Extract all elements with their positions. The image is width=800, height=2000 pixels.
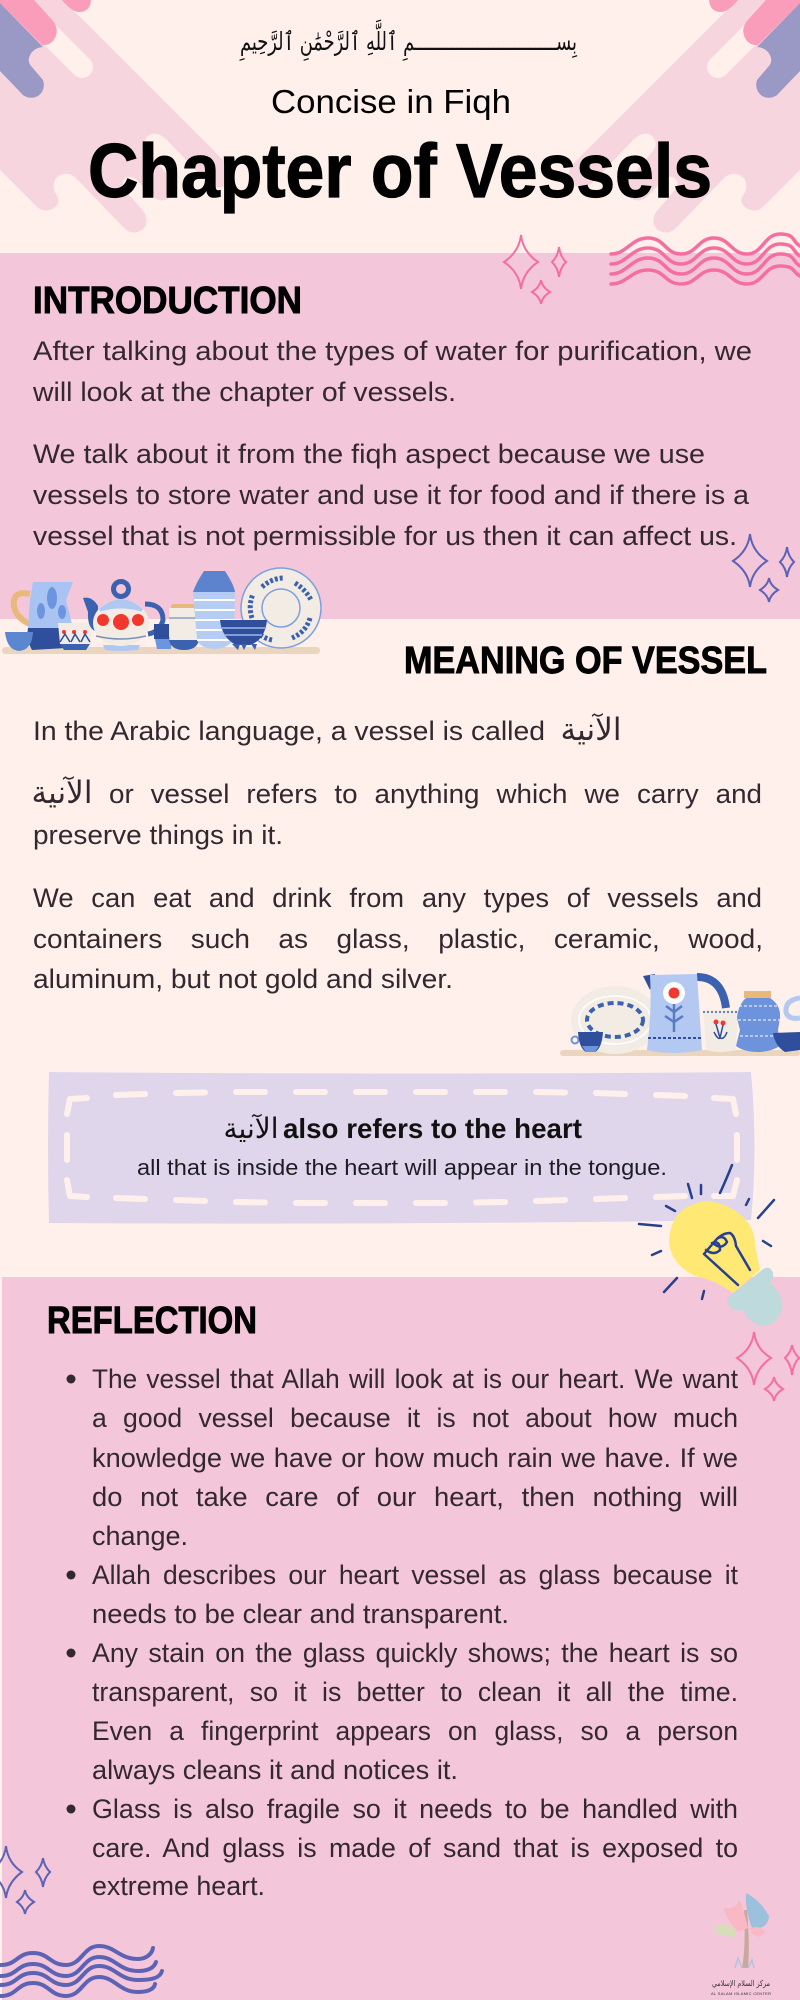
icon: blue sparkles, bottom left [0, 1846, 50, 1914]
text block: introduction: After talking about the types of water for purification, we [33, 336, 752, 366]
bismillah calligraphy: بِســـــــــــــــــــــــــــمِ ٱللَّهِ ٱلرَّحْمَٰنِ ٱلرَّحِيمِ [239, 19, 577, 61]
bullet point 1: do not take care of our heart, then nothing will [92, 1482, 738, 1512]
text block: meaning of vessel: or vessel refers to anything which we carry and [109, 779, 762, 809]
bullet point 3: Even a fingerprint appears on glass, so a person [92, 1716, 738, 1746]
text block: meaning of vessel: In the Arabic language, a vessel is called [33, 716, 545, 746]
tumbler [154, 624, 173, 649]
teapot [83, 582, 163, 651]
bowl [220, 620, 267, 650]
text block: meaning of vessel: aluminum, but not gold and silver. [33, 964, 453, 994]
icon: light bulb [639, 1165, 782, 1326]
bullet point 4: care. And glass is made of sand that is exposed to [92, 1833, 738, 1863]
bullet point 1 [66, 1364, 738, 1551]
text block: meaning of vessel: We can eat and drink from any types of vessels and [33, 883, 762, 913]
heading: meaning of vessel: MEANING OF VESSEL [404, 640, 767, 682]
dotted bowl [773, 1032, 800, 1052]
bullet point 4 [66, 1794, 738, 1901]
illustration: shelf of vessels, right [560, 974, 800, 1056]
heading: introduction: INTRODUCTION [33, 280, 302, 322]
decorative corner shapes, right [568, 0, 800, 233]
decorative corner shapes, left [0, 0, 232, 233]
blue arc [786, 998, 800, 1018]
jar [169, 604, 199, 650]
bullet point 1: a good vessel because it is not about how much [92, 1403, 738, 1433]
text block: meaning of vessel: الآنية [32, 775, 92, 811]
text block: introduction: vessel that is not permissible for us then it can affect us. [33, 521, 737, 551]
bullet point 2 [66, 1560, 738, 1629]
subtitle: Concise in Fiqh [271, 83, 511, 120]
text block: introduction: We talk about it from the fiqh aspect because we use [33, 439, 705, 469]
callout text: all that is inside the heart will appear in the tongue. [137, 1155, 667, 1180]
bullet point 1: change. [92, 1521, 188, 1551]
striped vase [193, 571, 235, 649]
icon: blue sparkles [733, 534, 794, 602]
heading: reflection: REFLECTION [47, 1300, 257, 1342]
text block: introduction: vessels to store water and use it for food and if there is a [33, 480, 750, 510]
text block: meaning of vessel: preserve things in it. [33, 820, 283, 850]
icon: pink sparkles [504, 235, 566, 304]
bullet point 2: needs to be clear and transparent. [92, 1599, 509, 1629]
jug [14, 582, 73, 650]
logo: Al Salam Islamic Center: مركز السلام الإسلامي [712, 1979, 770, 1989]
panel: reflection background [2, 1277, 800, 2000]
title: Chapter of Vessels [88, 129, 712, 214]
text block: introduction: will look at the chapter of vessels. [32, 377, 456, 407]
kettle [643, 974, 726, 1053]
oval plate [571, 986, 659, 1054]
bullet point 1: knowledge we have or how much rain we have. If we [92, 1443, 738, 1473]
bullet point 3: always cleans it and notices it. [92, 1755, 458, 1785]
panel: introduction background [0, 253, 800, 619]
text block: introduction [32, 336, 752, 551]
bullet point 2: Allah describes our heart vessel as glass because it [92, 1560, 738, 1590]
text block: meaning of vessel: الآنية [561, 712, 621, 748]
bullet point 3: Any stain on the glass quickly shows; the heart is so [92, 1638, 738, 1668]
callout heading: الآنية [223, 1112, 279, 1145]
callout heading: also refers to the heart [283, 1113, 582, 1144]
icon: pink waves [611, 234, 800, 284]
cup with red flowers [58, 623, 92, 650]
dark cup [572, 1032, 603, 1052]
callout: heart banner [48, 1072, 754, 1224]
decorated plate [241, 568, 321, 648]
logo: Al Salam Islamic Center: AL SALAM ISLAMIC CENTER [711, 1991, 771, 1996]
bullet point 1: The vessel that Allah will look at is our heart. We want [92, 1364, 738, 1394]
knitted jar [736, 991, 780, 1052]
text block: meaning of vessel [32, 712, 763, 994]
list: reflection points [66, 1364, 738, 1901]
bullet point 3 [66, 1638, 738, 1785]
logo: Al Salam Islamic Center [711, 1893, 771, 1996]
icon: blue waves [1, 1946, 162, 1996]
text block: meaning of vessel: containers such as glass, plastic, ceramic, wood, [33, 924, 763, 954]
small blue cup [5, 632, 33, 651]
bullet point 4: Glass is also fragile so it needs to be handled with [92, 1794, 738, 1824]
icon: pink sparkles, reflection [737, 1332, 799, 1401]
flower mug [703, 1010, 738, 1052]
bullet point 4: extreme heart. [92, 1871, 265, 1901]
bullet point 3: transparent, so it is better to clean it all the time. [92, 1677, 738, 1707]
illustration: shelf of vessels, left [2, 568, 321, 654]
